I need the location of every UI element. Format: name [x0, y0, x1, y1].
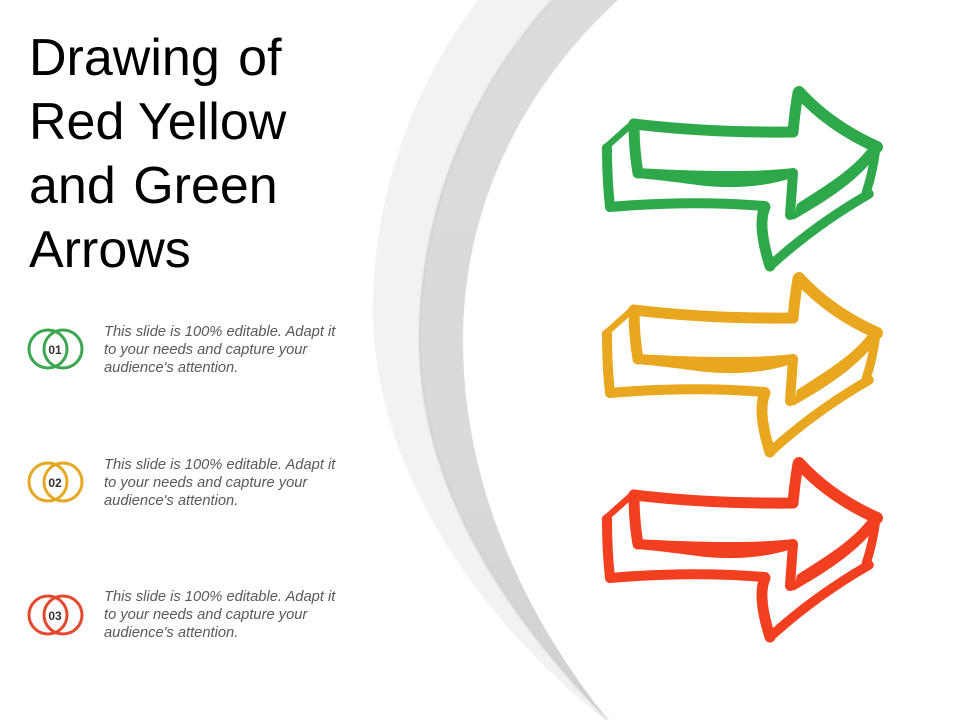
text block 2: audience's attention.: [104, 493, 238, 509]
badge 02: [28, 462, 84, 502]
text block 3: This slide is 100% editable. Adapt it: [104, 589, 335, 605]
text block 1: [104, 324, 336, 376]
title: Drawing of: [29, 29, 282, 87]
text block 3: to your needs and capture your: [104, 607, 307, 623]
text block 2: to your needs and capture your: [104, 475, 307, 491]
title: Red Yellow: [29, 93, 286, 151]
text block 2: [104, 457, 336, 509]
text block 3: [104, 589, 336, 641]
title: and Green: [29, 157, 278, 215]
title: [29, 29, 286, 279]
badge 03: 03: [48, 609, 62, 623]
text block 1: This slide is 100% editable. Adapt it: [104, 324, 335, 340]
text block 1: audience's attention.: [104, 360, 238, 376]
text block 1: to your needs and capture your: [104, 342, 307, 358]
badge 03: [28, 594, 84, 636]
title: Arrows: [29, 221, 191, 279]
badge 01: [28, 328, 84, 370]
text block 3: audience's attention.: [104, 625, 238, 641]
badge 02: 02: [48, 476, 62, 490]
badge 01: 01: [48, 343, 62, 357]
text block 2: This slide is 100% editable. Adapt it: [104, 457, 335, 473]
